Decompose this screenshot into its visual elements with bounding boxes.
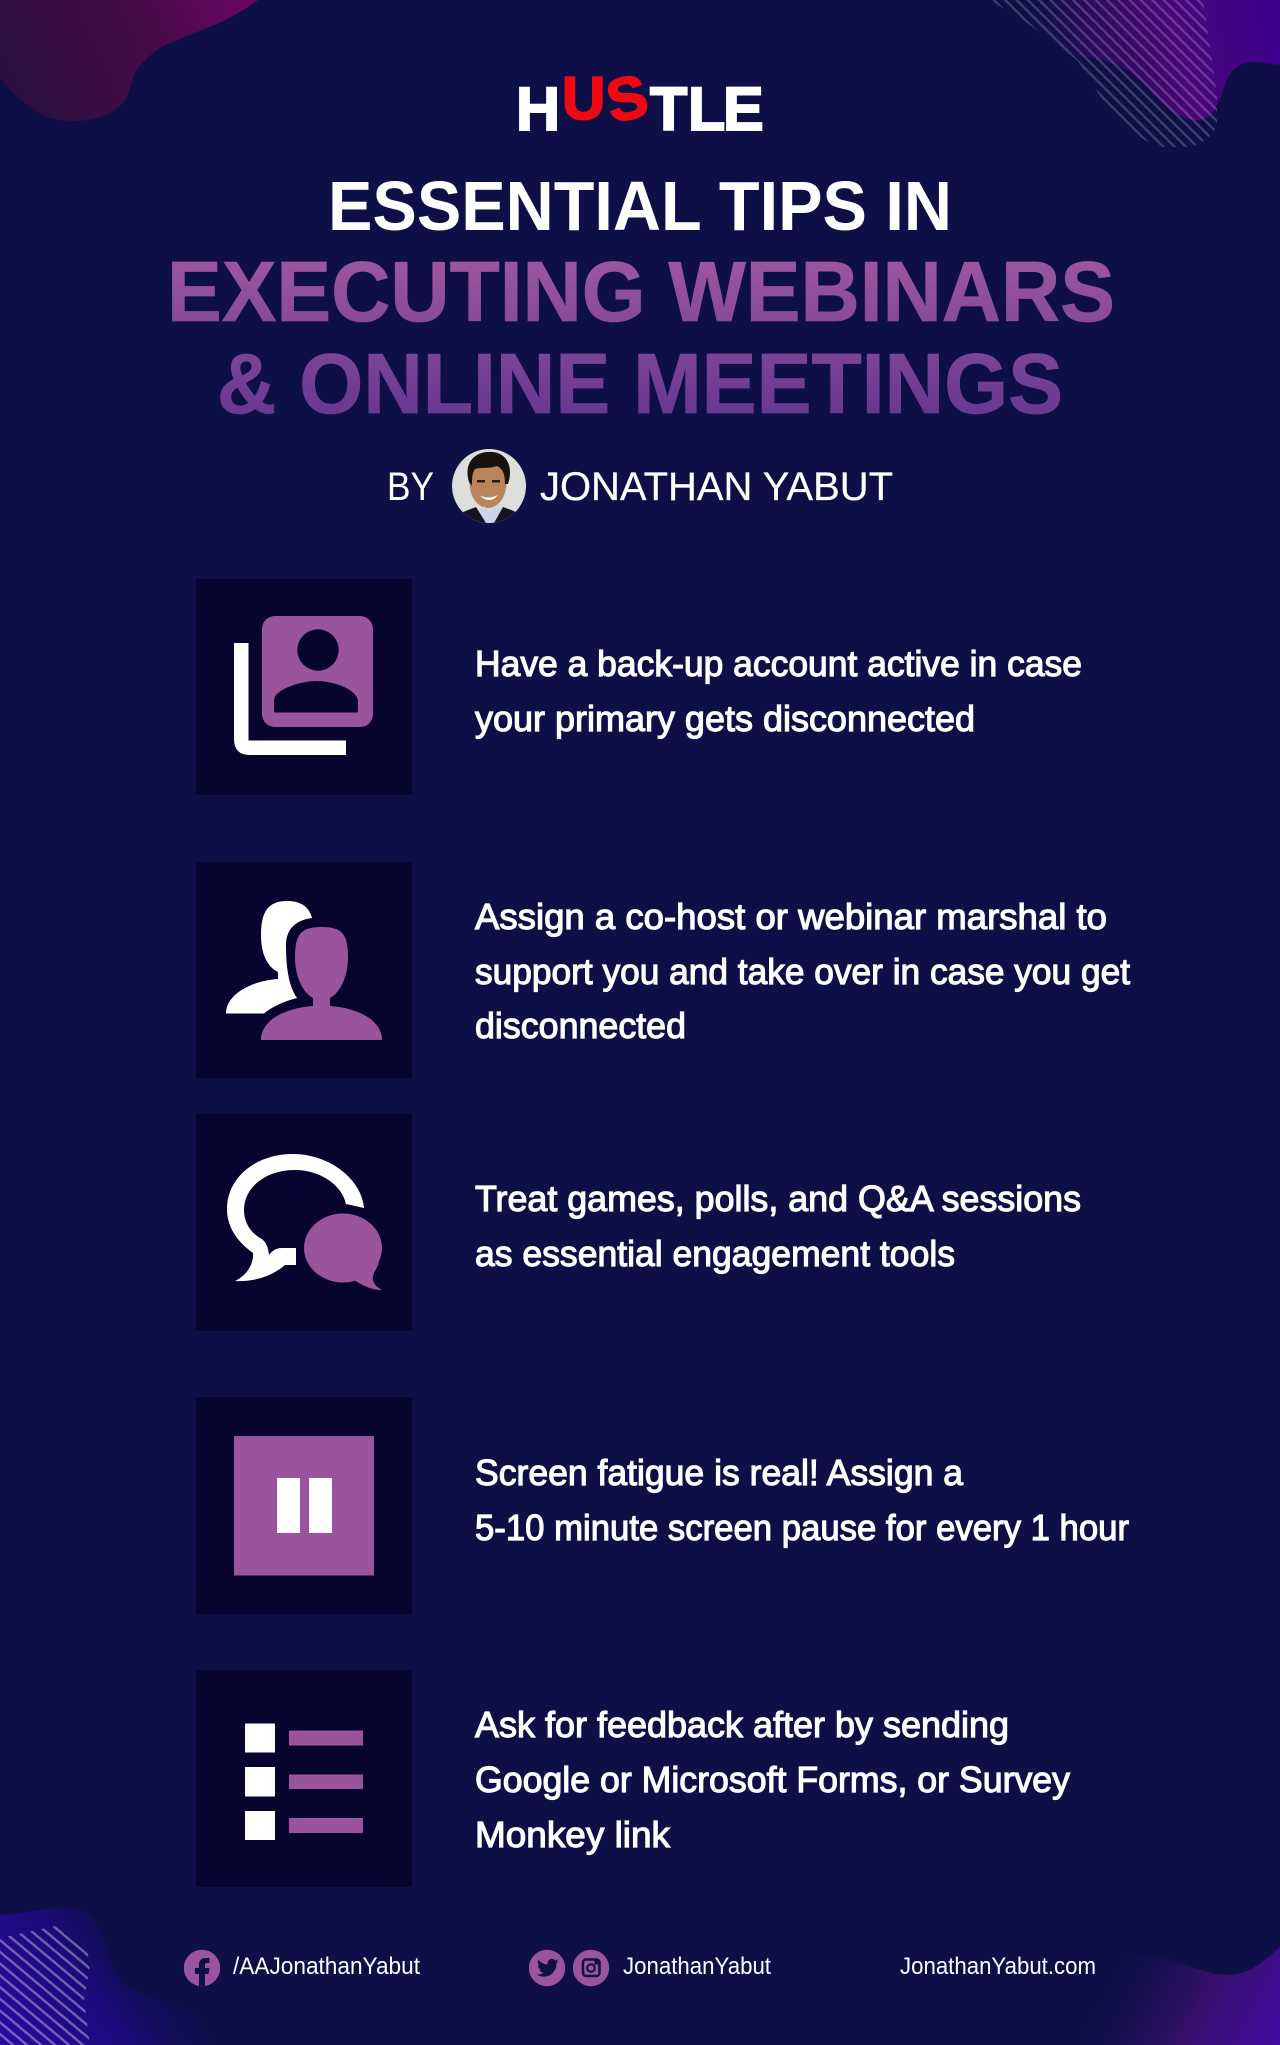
tip 2 text: disconnected [475, 1005, 686, 1046]
tip 4 text [475, 1452, 1129, 1548]
icon tile: two people [196, 862, 412, 1078]
decoration: top-right blob and stripes [990, 0, 1280, 147]
avatar portrait [450, 447, 528, 525]
twitter and instagram handle: JonathanYabut [623, 1953, 771, 1980]
logo: HUSTLE: H [516, 75, 560, 143]
facebook handle: /AAJonathanYabut [233, 1953, 420, 1980]
title [167, 167, 1115, 432]
logo: HUSTLE: S [601, 62, 654, 135]
tip 5 text: Google or Microsoft Forms, or Survey [475, 1759, 1070, 1800]
tip 2 text: support you and take over in case you get [475, 951, 1130, 992]
tip 4 text: Screen fatigue is real! Assign a [475, 1452, 964, 1493]
tip 4 text: 5-10 minute screen pause for every 1 hour [475, 1507, 1129, 1548]
logo: HUSTLE: T [650, 75, 687, 143]
title line 1: ESSENTIAL TIPS IN [328, 167, 952, 245]
icon tile: speech bubbles [196, 1114, 412, 1331]
panel: tip 3 [196, 1114, 1081, 1331]
icon: instagram [573, 1950, 609, 1986]
tip 2 text: Assign a co-host or webinar marshal to [475, 896, 1107, 937]
icon: twitter [529, 1950, 565, 1986]
panel: tip 4 [196, 1397, 1129, 1614]
icon tile: feedback form [196, 1670, 412, 1887]
decoration: top-left blob [0, 0, 258, 121]
logo: HUSTLE: E [723, 75, 764, 143]
tip 3 text: as essential engagement tools [475, 1233, 955, 1274]
tip 1 text: Have a back-up account active in case [475, 643, 1082, 684]
tip 1 text: your primary gets disconnected [475, 698, 975, 739]
tip 5 text [475, 1704, 1070, 1855]
decoration: bottom-left blob and stripes [0, 1908, 213, 2045]
title line 3: & ONLINE MEETINGS [217, 337, 1063, 432]
title line 2: EXECUTING WEBINARS [167, 245, 1115, 340]
icon tile: contact cards [196, 579, 412, 795]
footer social links [184, 1950, 1096, 1986]
tip 3 text: Treat games, polls, and Q&A sessions [475, 1178, 1081, 1219]
decoration: bottom-right blob [1050, 1947, 1280, 2045]
panel: tip 5 [196, 1670, 1070, 1887]
byline prefix: BY [387, 465, 434, 509]
icon tile: pause screen [196, 1397, 412, 1614]
byline [387, 447, 893, 525]
logo: HUSTLE [516, 62, 764, 143]
byline name: JONATHAN YABUT [540, 465, 893, 509]
tip 2 text [475, 896, 1130, 1046]
website: JonathanYabut.com [900, 1953, 1096, 1980]
icon: facebook [184, 1950, 220, 1986]
panel: tip 2 [196, 862, 1130, 1078]
logo: HUSTLE: L [688, 75, 725, 143]
tip 1 text [475, 643, 1082, 739]
tip 5 text: Monkey link [475, 1814, 671, 1855]
tip 3 text [475, 1178, 1081, 1274]
tip 5 text: Ask for feedback after by sending [475, 1704, 1009, 1745]
logo: HUSTLE: U [562, 65, 605, 132]
panel: tip 1 [196, 579, 1082, 795]
